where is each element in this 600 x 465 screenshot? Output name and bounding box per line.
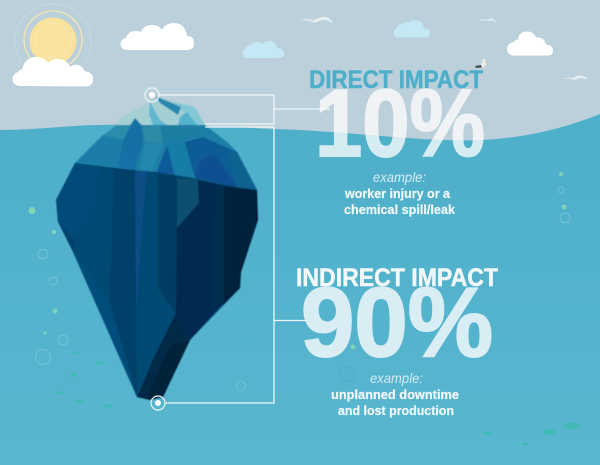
- example text: direct: chemical spill/leak: [344, 202, 456, 217]
- icon: small white cloud: [507, 32, 553, 56]
- marker: iceberg bottom: [151, 396, 165, 410]
- fish shoals: [57, 352, 580, 445]
- bracket: indirect impact connector: [165, 127, 306, 403]
- iceberg: [56, 97, 258, 400]
- sea water: [0, 114, 600, 465]
- direct impact block: [309, 66, 485, 217]
- icon: birds: [300, 17, 587, 80]
- example text: indirect: and lost production: [338, 403, 454, 418]
- icon: sun: [15, 4, 91, 80]
- icon: pale blue cloud left: [243, 41, 284, 58]
- number: 90%: 90%: [301, 267, 493, 377]
- sky background: [0, 0, 600, 150]
- example text: indirect: [331, 387, 459, 418]
- number: 10%: 10%: [315, 70, 485, 177]
- example text: direct: worker injury or a: [344, 186, 451, 201]
- heading: indirect impact: INDIRECT IMPACT: [296, 264, 498, 292]
- bracket: direct impact connector: [158, 95, 330, 124]
- iceberg tip above the water: [117, 97, 205, 125]
- icon: white cloud: [120, 23, 194, 50]
- marker: iceberg top: [145, 88, 159, 102]
- iceberg body, dark submerged mass: [56, 163, 258, 400]
- example label: example:: [370, 370, 423, 386]
- example label: example:: [373, 169, 426, 185]
- heading: direct impact: DIRECT IMPACT: [309, 66, 483, 94]
- iceberg body, upper light band: [75, 118, 257, 190]
- icon: pale blue cloud right: [394, 20, 430, 38]
- icon: cloud by the sun: [13, 57, 93, 86]
- example text: indirect: unplanned downtime: [331, 387, 459, 402]
- indirect impact block: [296, 264, 498, 418]
- icon: seagull on the text: [475, 59, 486, 68]
- bubbles and plankton dots: [28, 172, 570, 390]
- example text: direct: [344, 186, 456, 217]
